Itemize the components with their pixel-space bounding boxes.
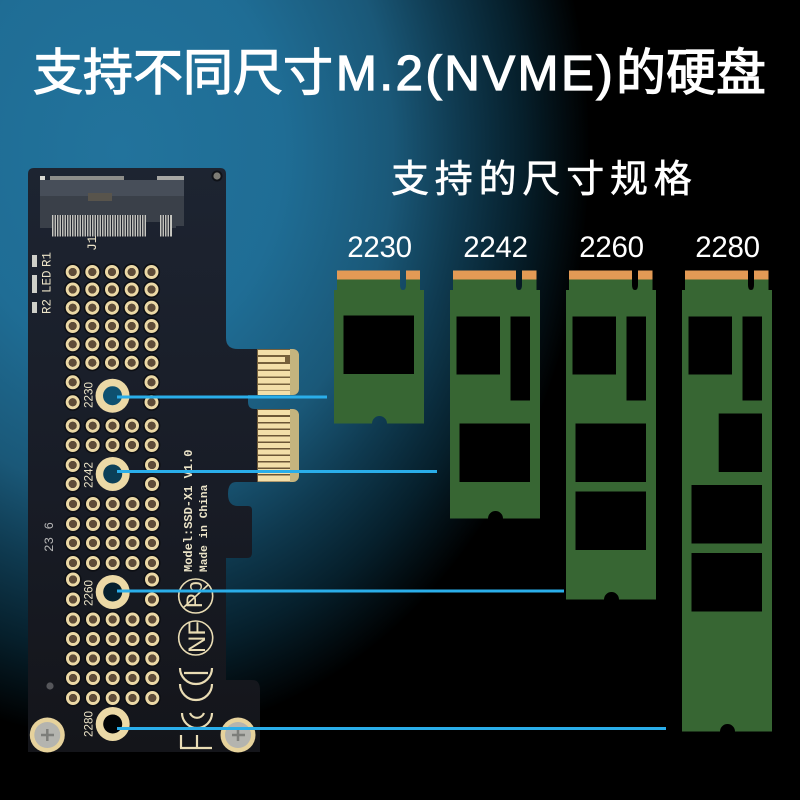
M.2 connector <box>40 176 184 237</box>
title <box>33 45 766 101</box>
through-hole grid <box>64 263 161 707</box>
connector line 2230 <box>117 396 327 398</box>
silkscreen labels: R1 <box>40 252 54 267</box>
connector line 2260 <box>117 590 564 592</box>
SSD 2242 <box>450 270 540 518</box>
mounting dot <box>212 170 222 182</box>
compliance logos: Pb <box>182 581 207 608</box>
silkscreen labels: J1 <box>85 235 100 251</box>
gold fingers upper <box>257 349 299 395</box>
silkscreen labels: 2242 <box>82 462 96 488</box>
subtitle: supported sizes: 支持的尺寸规格 <box>391 159 698 201</box>
silkscreen labels: 23 6 <box>43 522 57 552</box>
title: 的硬盘 <box>616 45 766 101</box>
screw left <box>30 718 65 752</box>
size label 2242: 2242 <box>463 231 528 264</box>
silkscreen labels: 2230 <box>82 381 96 408</box>
compliance logos <box>179 579 213 748</box>
silkscreen labels: 2260 <box>82 579 96 606</box>
card body <box>28 168 299 752</box>
mounting hole 2260 <box>96 575 130 609</box>
silkscreen labels: Made in China <box>199 484 211 572</box>
connector line 2280 <box>117 727 666 730</box>
mounting hole 2230 <box>96 379 130 413</box>
compliance logos: NF <box>184 621 211 653</box>
silkscreen labels <box>40 235 211 737</box>
SSD 2230 <box>334 270 424 424</box>
SSD 2260 <box>566 270 656 600</box>
connector line 2242 <box>117 470 437 473</box>
small LED and resistor pads <box>32 255 37 313</box>
size label 2280: 2280 <box>695 231 760 264</box>
silkscreen labels: R2 <box>40 299 54 314</box>
title: M.2(NVME) <box>336 47 615 101</box>
size label 2260: 2260 <box>579 231 644 264</box>
silkscreen labels: LED <box>40 270 54 293</box>
silkscreen labels: Model:SSD-X1 V1.0 <box>182 450 196 572</box>
title: 支持不同尺寸 <box>33 45 333 101</box>
silkscreen labels: 2280 <box>82 710 96 737</box>
mounting hole 2242 <box>96 457 130 491</box>
SSD 2280 <box>682 270 772 732</box>
panel: adapter card PCB <box>28 168 299 752</box>
screw right <box>220 718 256 752</box>
gold fingers lower <box>257 409 299 482</box>
mounting hole 2280 <box>96 707 130 741</box>
size label 2230: 2230 <box>347 231 412 264</box>
